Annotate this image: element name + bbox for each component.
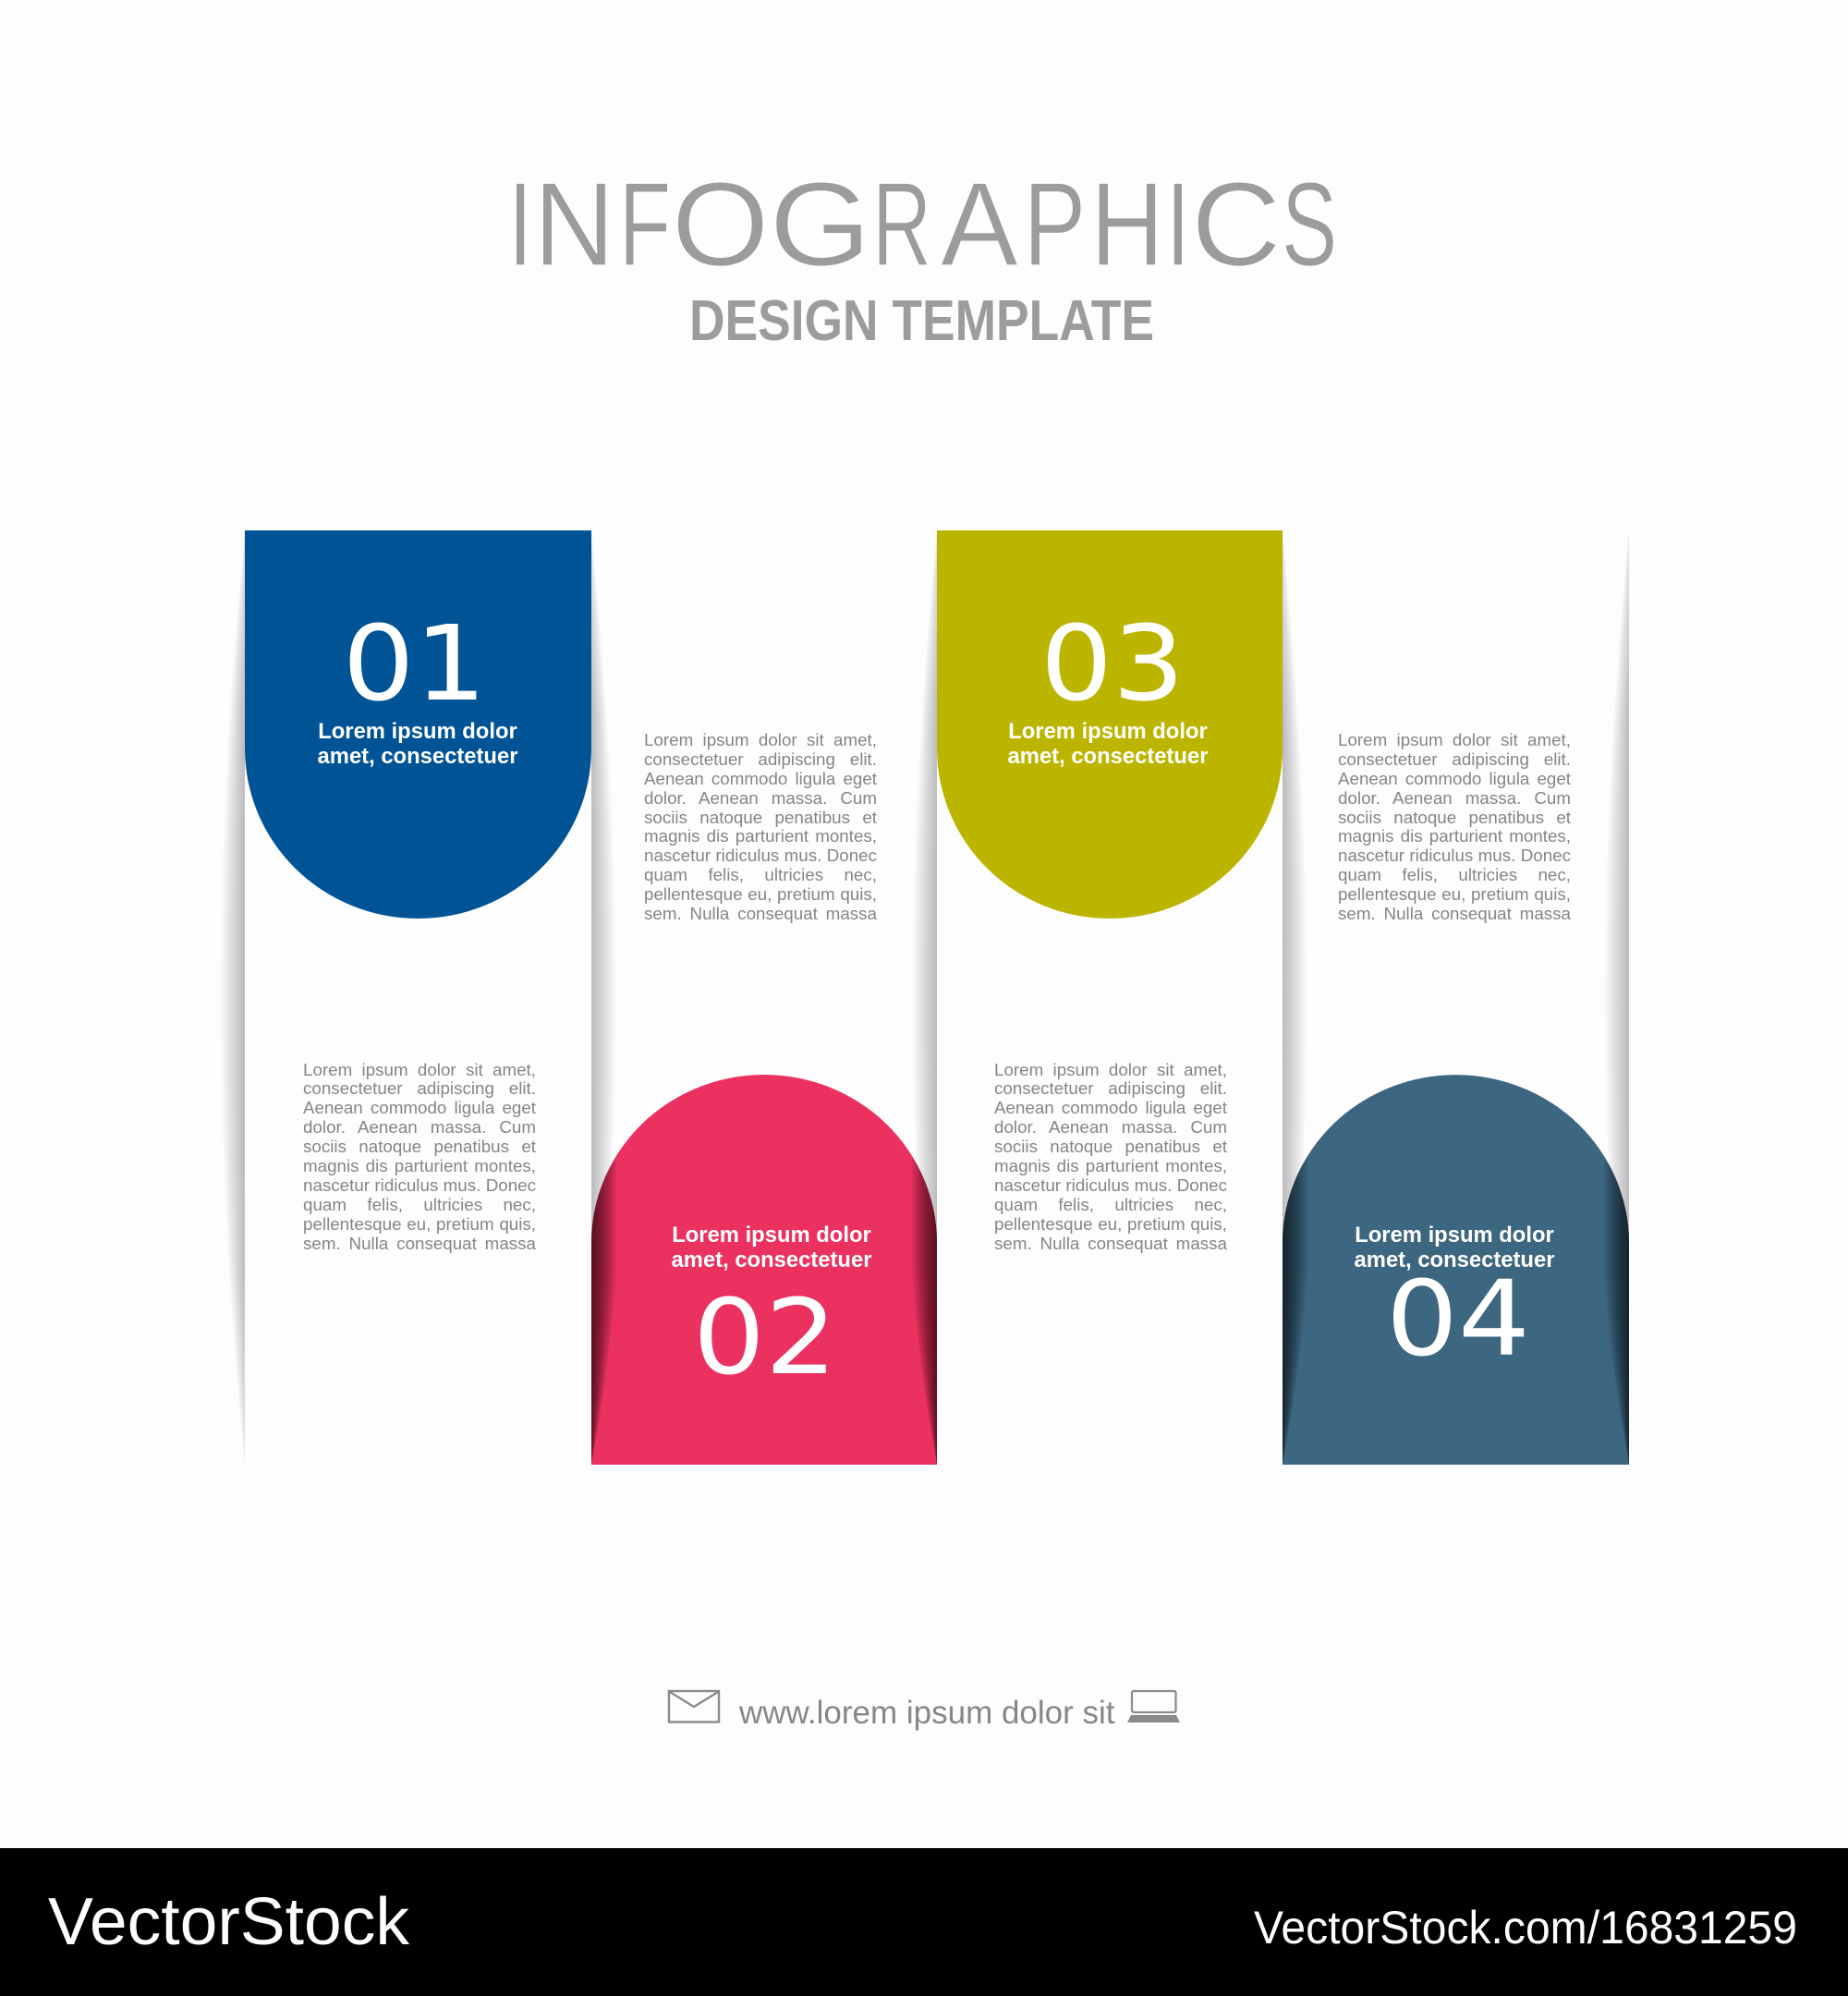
text block: column 4: sociis natoque penatibus et [1338,808,1571,827]
title: N [534,158,614,291]
number 02: 02 [693,1278,837,1398]
title: R [872,159,931,291]
text block: column 2: quam felis, ultricies nec, [644,865,877,884]
panel shadows [221,530,1629,1465]
website text: www.lorem ipsum dolor sit [738,1695,1115,1731]
title [508,157,1337,291]
label 04: amet, consectetuer [1355,1248,1554,1272]
text block: column 1: quam felis, ultricies nec, [303,1195,536,1214]
text block: column 4: consectetuer adipiscing elit. [1338,749,1571,769]
label 02: amet, consectetuer [672,1248,871,1272]
text block: column 3: sem. Nulla consequat massa [994,1234,1227,1253]
text block: column 2: pellentesque eu, pretium quis, [644,884,877,904]
text block: column 3: dolor. Aenean massa. Cum [994,1117,1227,1137]
subtitle: DESIGN TEMPLATE [689,289,1154,353]
text block: column 3: quam felis, ultricies nec, [994,1195,1227,1214]
text block: column 4: pellentesque eu, pretium quis, [1338,884,1571,904]
text block: column 2: dolor. Aenean massa. Cum [644,788,877,808]
text block: column 2: consectetuer adipiscing elit. [644,749,877,769]
text block: column 2: Aenean commodo ligula eget [644,769,877,788]
text block: column 4: nascetur ridiculus mus. Donec [1338,846,1571,865]
title: S [1282,157,1337,291]
text block: column 3 [994,1059,1227,1253]
title: F [619,157,671,291]
text block: column 2: Lorem ipsum dolor sit amet, [644,730,877,749]
text block: column 3: sociis natoque penatibus et [994,1137,1227,1156]
text block: column 3: Lorem ipsum dolor sit amet, [994,1059,1227,1079]
text block: column 1: Lorem ipsum dolor sit amet, [303,1059,536,1079]
footer logo text: VectorStock [48,1885,410,1959]
title: O [672,158,769,291]
title: I [1165,159,1190,291]
label 04: Lorem ipsum dolor [1355,1223,1554,1248]
number 01: 01 [343,604,487,724]
title: G [769,157,871,291]
text block: column 3: pellentesque eu, pretium quis, [994,1214,1227,1234]
text block: column 1: dolor. Aenean massa. Cum [303,1117,536,1137]
label 03: Lorem ipsum dolor [1008,719,1208,744]
text block: column 4: Aenean commodo ligula eget [1338,769,1571,788]
title: P [1024,157,1086,291]
text block: column 1: consectetuer adipiscing elit. [303,1078,536,1098]
label 02: Lorem ipsum dolor [672,1223,871,1248]
footer band [0,1848,1848,1996]
text block: column 4: quam felis, ultricies nec, [1338,865,1571,884]
title: I [508,159,533,291]
text block: column 1: magnis dis parturient montes, [303,1156,536,1175]
text block: column 1: Aenean commodo ligula eget [303,1098,536,1117]
text block: column 3: nascetur ridiculus mus. Donec [994,1175,1227,1195]
text block: column 4: dolor. Aenean massa. Cum [1338,788,1571,808]
label 03: amet, consectetuer [1008,744,1208,769]
text block: column 2: nascetur ridiculus mus. Donec [644,846,877,865]
text block: column 1: pellentesque eu, pretium quis, [303,1214,536,1234]
icon: envelope [669,1691,719,1722]
text block: column 1: nascetur ridiculus mus. Donec [303,1175,536,1195]
footer image id: VectorStock.com/16831259 [1254,1902,1797,1953]
text block: column 1: sociis natoque penatibus et [303,1137,536,1156]
panel 01: blue tab [245,530,591,919]
label 01: Lorem ipsum dolor [318,719,517,744]
icon: laptop [1127,1691,1180,1722]
label 01: amet, consectetuer [318,744,517,769]
panel 02: pink tab [591,1075,937,1465]
text block: column 1 [303,1059,536,1253]
text block: column 2: sociis natoque penatibus et [644,808,877,827]
text block: column 4: sem. Nulla consequat massa [1338,904,1571,923]
panel 04: slate tab [1283,1075,1629,1465]
title: H [1090,158,1164,291]
text block: column 4 [1338,730,1571,923]
text block: column 2: magnis dis parturient montes, [644,826,877,846]
text block: column 2: sem. Nulla consequat massa [644,904,877,923]
title: A [941,157,1018,290]
text block: column 1: sem. Nulla consequat massa [303,1234,536,1253]
title: C [1191,157,1281,290]
text block: column 3: Aenean commodo ligula eget [994,1098,1227,1117]
number 04: 04 [1386,1260,1530,1380]
text block: column 4: Lorem ipsum dolor sit amet, [1338,730,1571,749]
text block: column 3: consectetuer adipiscing elit. [994,1078,1227,1098]
number 03: 03 [1040,604,1185,724]
text block: column 4: magnis dis parturient montes, [1338,826,1571,846]
panel 03: olive tab [937,530,1283,919]
text block: column 3: magnis dis parturient montes, [994,1156,1227,1175]
text block: column 2 [644,730,877,923]
